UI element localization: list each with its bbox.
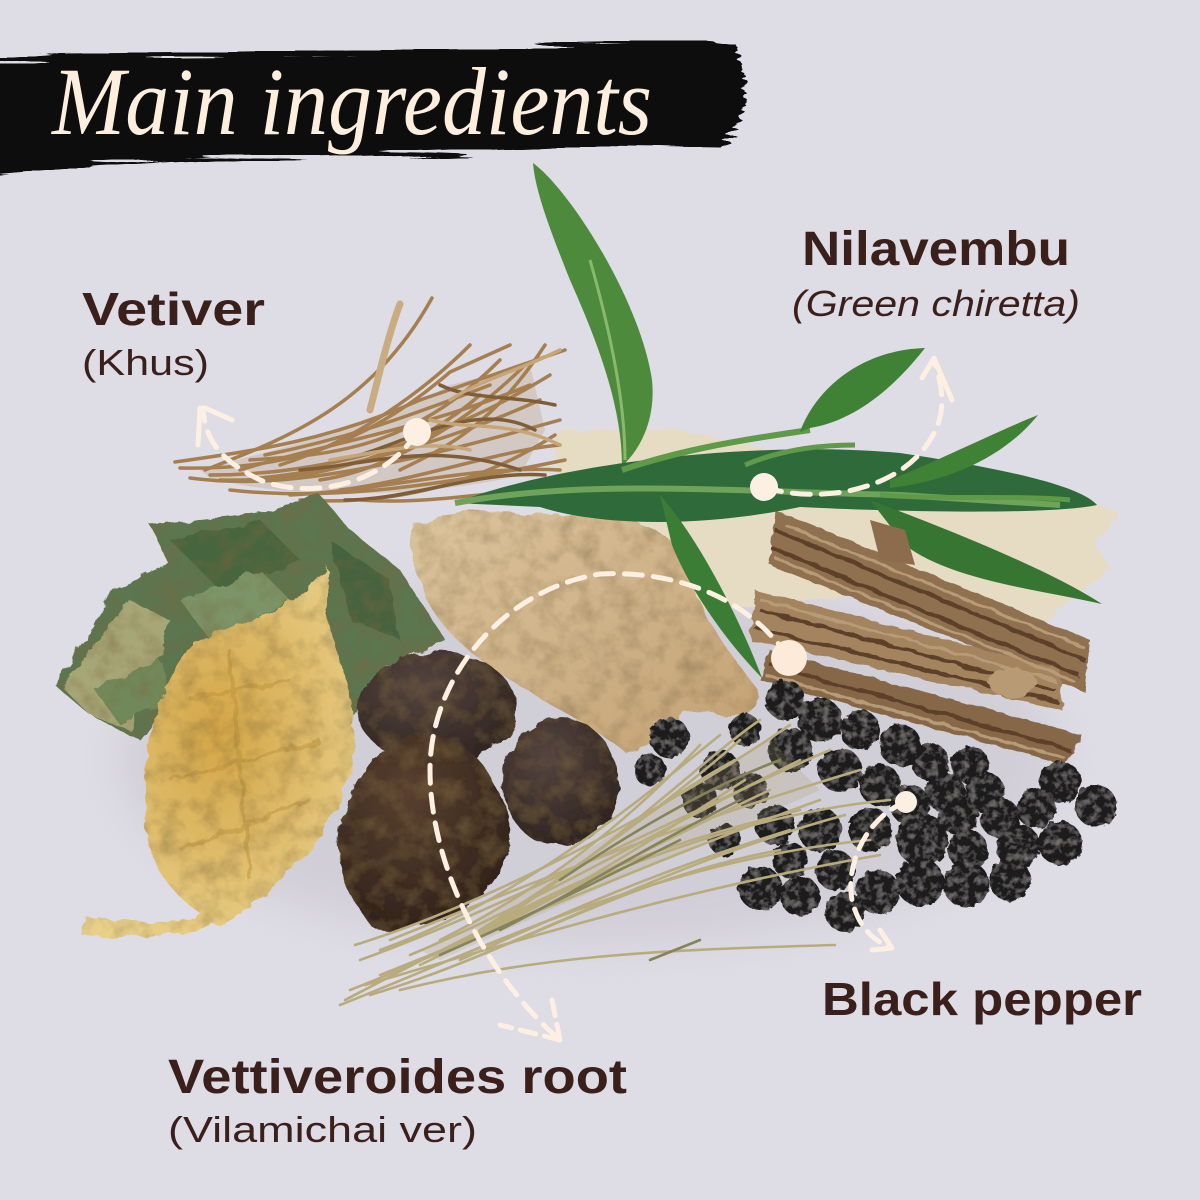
yellow pouch xyxy=(82,566,355,937)
label: Nilavembu xyxy=(792,223,1080,324)
dried green leaves xyxy=(55,495,445,740)
dark fruits xyxy=(338,652,618,930)
label: Vetiver: (Khus) xyxy=(82,342,209,383)
leader arrow: vettiveroides root xyxy=(430,574,807,1040)
pale wood slices xyxy=(555,428,1120,622)
label: Nilavembu: (Green chiretta) xyxy=(792,283,1080,324)
leader arrow: nilavembu xyxy=(750,358,952,501)
title banner xyxy=(0,41,744,176)
wood sticks xyxy=(750,510,1090,765)
label: Vettiveroides root xyxy=(168,1051,627,1150)
label: Vettiveroides root: (Vilamichai ver) xyxy=(168,1109,477,1150)
black peppercorns xyxy=(634,680,1117,932)
label: Vettiveroides root: Vettiveroides root xyxy=(168,1051,627,1104)
label: Vetiver: Vetiver xyxy=(82,283,265,335)
label: Vetiver xyxy=(82,283,265,383)
nilavembu plant xyxy=(455,163,1102,678)
title: Main ingredients xyxy=(50,48,652,155)
dry grass bundle xyxy=(340,720,890,1005)
vetiver roots xyxy=(175,298,565,501)
label: Black pepper: Black pepper xyxy=(822,973,1142,1025)
ground shadow xyxy=(120,575,1060,945)
label: Nilavembu: Nilavembu xyxy=(802,223,1070,276)
leader arrow: vetiver xyxy=(198,408,431,489)
leader arrow: black pepper xyxy=(851,791,917,950)
ginger xyxy=(410,512,759,752)
